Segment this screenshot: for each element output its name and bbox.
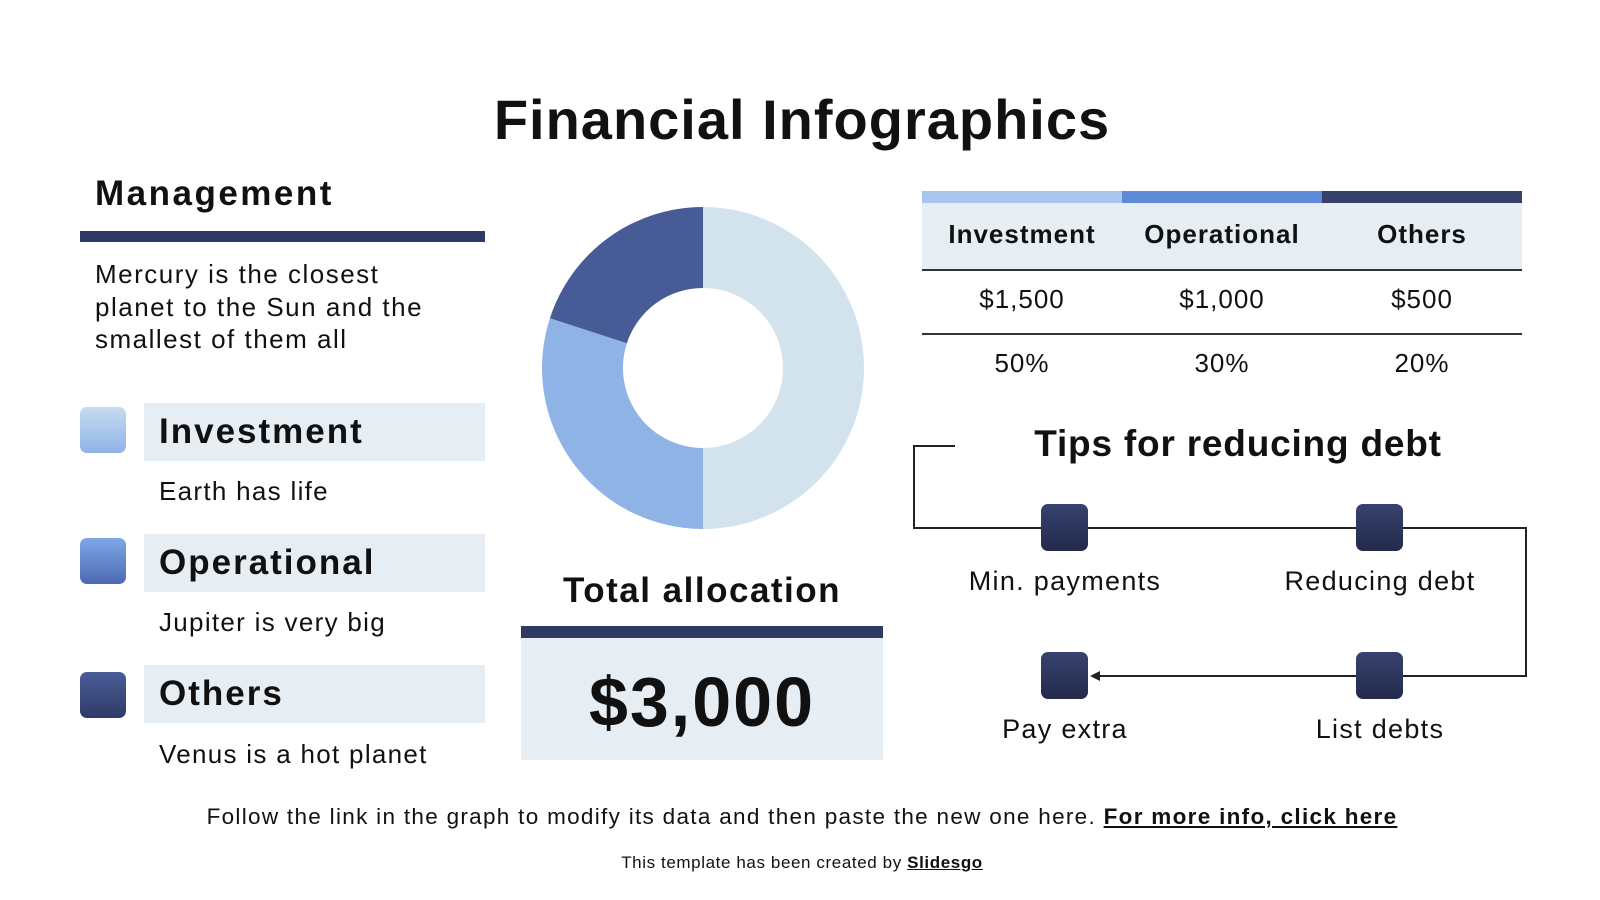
heading: tips: Tips for reducing debt <box>1034 423 1442 464</box>
donut chart <box>542 207 864 529</box>
table amounts <box>979 284 1453 314</box>
legend: others <box>80 665 485 769</box>
table headers <box>948 219 1467 249</box>
management bar <box>80 231 485 242</box>
total value: $3,000 <box>589 663 815 741</box>
step: min payments <box>969 504 1161 596</box>
table amounts: $500 <box>1391 284 1453 314</box>
total box <box>521 626 883 760</box>
legend: investment <box>80 403 485 506</box>
label: operational <box>144 534 485 592</box>
management text <box>95 259 423 354</box>
table <box>922 191 1522 378</box>
label: operational: Operational <box>159 543 375 582</box>
table percentages <box>994 348 1450 378</box>
step: min payments: Min. payments <box>969 566 1161 596</box>
title: Financial Infographics <box>494 88 1110 151</box>
management text: smallest of them all <box>95 324 348 354</box>
label: others <box>144 665 485 723</box>
management text: Mercury is the closest <box>95 259 379 289</box>
label: investment <box>144 403 485 461</box>
table amounts: $1,000 <box>1179 284 1265 314</box>
step: list debts <box>1316 652 1444 744</box>
table percentages: 20% <box>1394 348 1450 378</box>
icon: others square <box>80 672 126 718</box>
icon: operational square <box>80 538 126 584</box>
table headers: Investment <box>948 219 1096 249</box>
icon: investment square <box>80 407 126 453</box>
legend: operational <box>80 534 485 637</box>
credit: This template has been created by Slidesgo <box>621 853 983 872</box>
table headers: Operational <box>1144 219 1300 249</box>
table headers: Others <box>1377 219 1467 249</box>
step: reducing debt: Reducing debt <box>1284 566 1476 596</box>
text: operational: Jupiter is very big <box>159 607 386 637</box>
table percentages: 50% <box>994 348 1050 378</box>
text: others: Venus is a hot planet <box>159 739 428 769</box>
footer note: Follow the link in the graph to modify its data and then paste the new one here. For more info, click here <box>207 804 1397 829</box>
step: pay extra: Pay extra <box>1002 714 1128 744</box>
table amounts: $1,500 <box>979 284 1065 314</box>
heading: total allocation: Total allocation <box>563 571 841 610</box>
label: investment: Investment <box>159 412 364 451</box>
label: others: Others <box>159 674 284 713</box>
step: list debts: List debts <box>1316 714 1444 744</box>
table percentages: 30% <box>1194 348 1250 378</box>
management text: planet to the Sun and the <box>95 292 423 322</box>
step: pay extra <box>1002 652 1128 744</box>
text: investment: Earth has life <box>159 476 329 506</box>
heading: management: Management <box>95 174 334 213</box>
step: reducing debt <box>1284 504 1476 596</box>
